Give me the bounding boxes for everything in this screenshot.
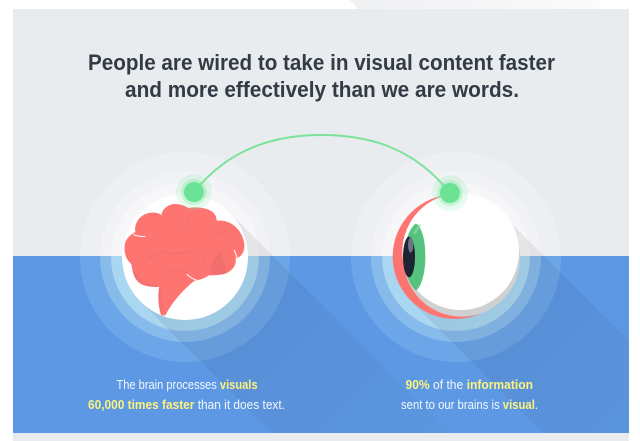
long shadow: eye: [412, 212, 629, 433]
icon: green dot brain: [176, 174, 212, 210]
brain disc: [122, 194, 248, 320]
long shadow: brain: [140, 212, 450, 433]
caption: brain: The brain processes visuals: [116, 377, 258, 392]
caption: brain: 60,000 times faster than it does text.: [88, 397, 285, 412]
icon: brain: [125, 204, 244, 315]
top corner decoration: [350, 0, 600, 9]
rings: brain: [80, 152, 290, 362]
title: and more effectively than we are words.: [125, 77, 519, 102]
icon: green dot eye: [432, 175, 468, 211]
caption: brain: [88, 377, 285, 412]
title: People are wired to take in visual content faster: [88, 50, 555, 75]
caption: eye: 90% of the information: [406, 377, 533, 392]
rings: eye: [351, 152, 561, 362]
caption: eye: sent to our brains is visual.: [401, 397, 538, 412]
title: [88, 50, 555, 102]
caption: eye: [401, 377, 538, 412]
bottom strip: [13, 433, 629, 441]
arrow: connecting arc: [194, 135, 450, 193]
icon: eye: [393, 193, 520, 319]
